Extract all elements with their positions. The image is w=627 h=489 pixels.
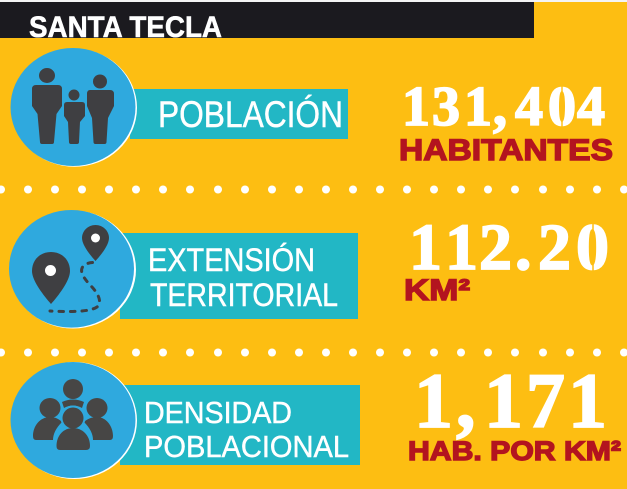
unit: km²: KM² bbox=[404, 274, 470, 307]
label bar: extensión territorial: TERRITORIAL bbox=[150, 277, 338, 313]
value: 112.20: 112.20 bbox=[409, 211, 609, 284]
panel: población bbox=[10, 48, 613, 167]
dotted divider 1 bbox=[0, 186, 627, 194]
label bar: extensión territorial: EXTENSIÓN bbox=[148, 242, 315, 278]
label bar: densidad poblacional: POBLACIONAL bbox=[144, 429, 349, 464]
icon: group of people bbox=[10, 362, 137, 479]
icon: family bbox=[10, 48, 137, 167]
value: 1,171: 1,171 bbox=[414, 357, 607, 444]
header band bbox=[0, 2, 534, 44]
label bar: población: POBLACIÓN bbox=[158, 94, 343, 135]
dotted divider 2 bbox=[0, 348, 627, 356]
label bar: densidad poblacional: DENSIDAD bbox=[144, 395, 292, 430]
panel: densidad poblacional bbox=[10, 357, 621, 479]
title: SANTA TECLA bbox=[29, 11, 222, 44]
value: 131,404: 131,404 bbox=[402, 76, 605, 138]
label bar: extensión territorial bbox=[120, 233, 358, 319]
label bar: población bbox=[130, 89, 348, 139]
icon: map pins with route bbox=[9, 210, 136, 328]
panel: extensión territorial bbox=[9, 210, 609, 328]
unit: habitantes: HABITANTES bbox=[399, 134, 613, 167]
label bar: densidad poblacional bbox=[120, 385, 360, 465]
unit: hab. por km²: HAB. POR KM² bbox=[408, 436, 621, 466]
